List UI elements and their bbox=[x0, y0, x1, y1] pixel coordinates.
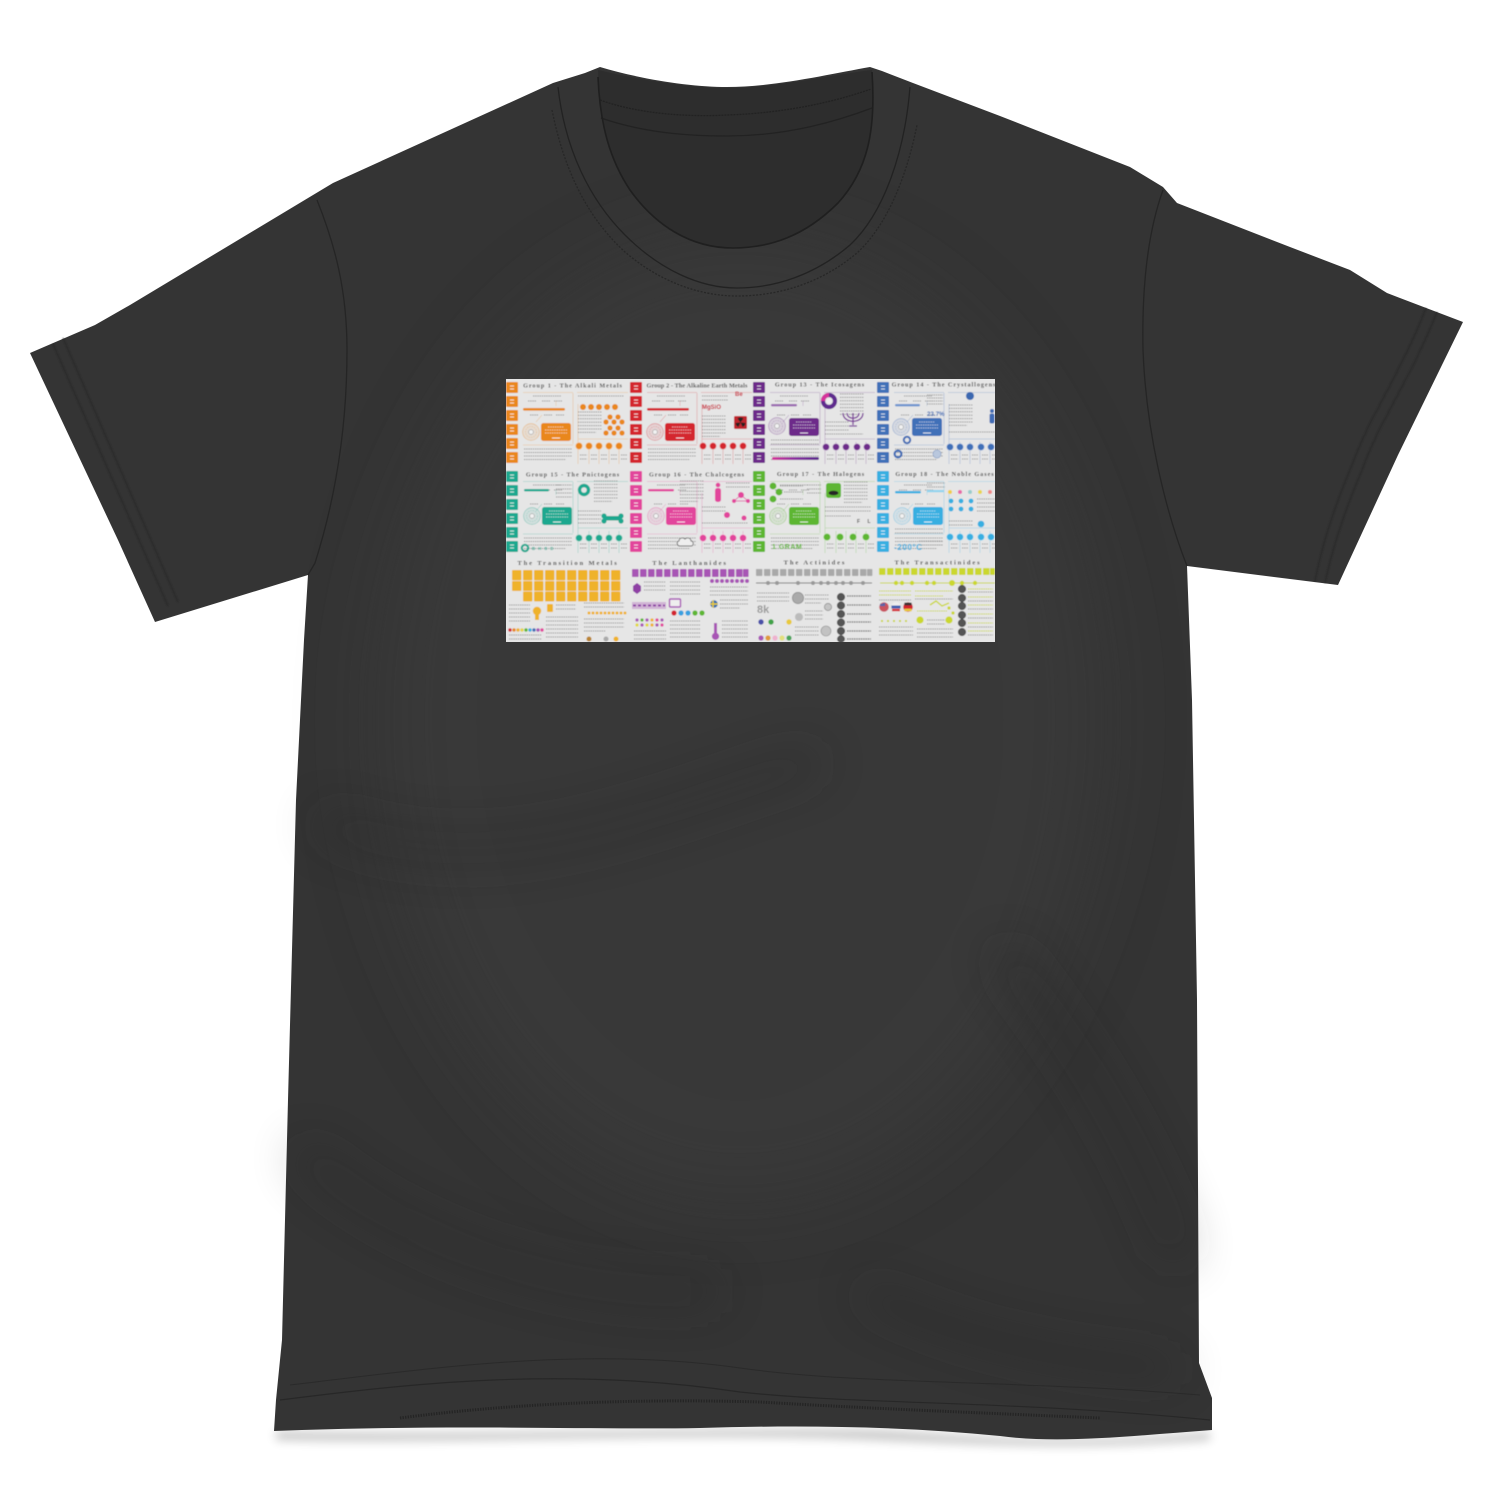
donut icon bbox=[580, 486, 588, 494]
beryllium symbol: Be bbox=[735, 392, 743, 398]
panel: group 2 alkaline earth metals bbox=[630, 382, 752, 464]
hexagon icon bbox=[633, 583, 641, 594]
text blocks bbox=[927, 395, 995, 432]
heading: The Lanthanides bbox=[652, 560, 728, 567]
inner collar back bbox=[598, 70, 873, 248]
text blocks bbox=[680, 481, 750, 523]
heading: The Transition Metals bbox=[517, 560, 619, 567]
panel: transactinides bbox=[879, 560, 995, 637]
heading: Group 16 - The Chalcogens bbox=[649, 472, 745, 478]
collar stitching bbox=[552, 72, 917, 296]
timeline bar bbox=[524, 489, 549, 491]
cloud icon bbox=[677, 538, 693, 546]
bone icon bbox=[601, 513, 624, 524]
panel: group 14 crystallogens bbox=[877, 382, 999, 464]
panel: group 17 halogens bbox=[753, 471, 875, 553]
timeline bar bbox=[647, 408, 689, 411]
timeline bar bbox=[771, 404, 797, 406]
accent dots bbox=[724, 512, 746, 520]
timeline bar bbox=[895, 491, 921, 493]
text blocks bbox=[780, 482, 871, 516]
tablet outline bbox=[670, 599, 680, 607]
text blocks bbox=[879, 589, 993, 637]
element row bbox=[879, 568, 995, 575]
dot row bbox=[580, 404, 618, 410]
large figure: 8k bbox=[757, 604, 770, 616]
text blocks bbox=[757, 593, 871, 639]
panel: group 16 chalcogens bbox=[630, 471, 752, 553]
scientist portraits bbox=[958, 585, 966, 636]
scientist portraits bbox=[837, 593, 845, 643]
grey circles bbox=[792, 592, 832, 636]
atom diagram bbox=[769, 418, 785, 434]
atom diagram bbox=[647, 424, 663, 440]
guitar icon bbox=[712, 623, 719, 640]
element box bbox=[789, 507, 819, 525]
lightbulb icon bbox=[533, 607, 541, 620]
heading: Group 1 - The Alkali Metals bbox=[523, 382, 623, 390]
purple dot row bbox=[710, 579, 749, 583]
panel: lanthanides bbox=[632, 560, 749, 640]
atom diagram bbox=[893, 419, 909, 435]
right sleeve seams bbox=[1143, 190, 1437, 583]
temperature figure: -200°C bbox=[894, 543, 923, 552]
donut chart bbox=[823, 395, 835, 407]
element circles bbox=[822, 444, 870, 450]
timeline bar bbox=[523, 408, 565, 411]
one gram figure: 1 GRAM bbox=[772, 544, 802, 551]
chemical symbols: F L bbox=[857, 519, 874, 525]
printed periodic table poster bbox=[500, 372, 1000, 648]
heading: Group 2 - The Alkaline Earth Metals bbox=[647, 382, 748, 390]
flag: germany bbox=[903, 602, 913, 612]
heading: The Actinides bbox=[784, 560, 846, 566]
element circles bbox=[576, 534, 622, 542]
small tile bbox=[547, 604, 553, 612]
discovery timeline bbox=[756, 581, 872, 585]
text blocks bbox=[578, 396, 624, 432]
atom diagram bbox=[648, 508, 664, 524]
poster background bbox=[500, 372, 1000, 648]
element box bbox=[789, 418, 819, 436]
garment shadow bbox=[276, 1429, 1210, 1446]
atom diagram bbox=[770, 508, 786, 524]
percentage figure: 23.7% bbox=[927, 411, 945, 418]
element circles bbox=[823, 533, 870, 541]
heading: Group 17 - The Halogens bbox=[777, 471, 865, 478]
element circles bbox=[700, 534, 746, 542]
timeline bar bbox=[648, 489, 674, 491]
element circles bbox=[576, 442, 622, 450]
swedish ball bbox=[710, 600, 718, 608]
element circles bbox=[946, 444, 994, 450]
panel: group 13 icosagens bbox=[753, 382, 875, 464]
panel: group 18 noble gases bbox=[877, 471, 999, 553]
element box bbox=[913, 507, 943, 525]
heading: The Transactinides bbox=[894, 560, 982, 566]
flag: russia bbox=[891, 602, 901, 612]
element box bbox=[665, 423, 695, 441]
element circles bbox=[946, 534, 994, 540]
discovery timeline bbox=[880, 580, 995, 586]
dot cluster bbox=[603, 414, 625, 436]
large yellow dots bbox=[916, 606, 955, 624]
radiation icon bbox=[734, 416, 747, 429]
heading: Group 15 - The Pnictogens bbox=[526, 472, 620, 478]
atom diagram bbox=[523, 424, 539, 440]
heading: Group 13 - The Icosagens bbox=[775, 382, 865, 388]
ornament band bbox=[632, 602, 666, 609]
element circles bbox=[700, 442, 746, 450]
panel: actinides bbox=[756, 560, 872, 643]
element row bbox=[756, 569, 872, 576]
yellow dash row bbox=[881, 620, 911, 622]
candelabra icon bbox=[843, 413, 863, 426]
text blocks bbox=[702, 396, 728, 436]
element box bbox=[666, 507, 696, 525]
fabric folds bbox=[300, 760, 1180, 1370]
green bullet circles bbox=[770, 483, 782, 502]
heading: Group 18 - The Noble Gases bbox=[895, 471, 995, 478]
rainbow dots bbox=[508, 628, 544, 632]
element box bbox=[541, 423, 571, 441]
molecule icon bbox=[732, 492, 750, 503]
element row bbox=[632, 569, 749, 577]
text blocks bbox=[771, 394, 864, 444]
text blocks bbox=[509, 603, 624, 639]
atom diagram bbox=[894, 508, 910, 524]
gold dot row bbox=[588, 612, 626, 614]
dot matrix bbox=[635, 618, 664, 627]
text blocks bbox=[895, 483, 997, 545]
bottom metal circles bbox=[586, 636, 618, 642]
chest light shading bbox=[380, 240, 1100, 1200]
formula label: MgSiO bbox=[702, 405, 721, 411]
text blocks bbox=[634, 582, 748, 639]
flag: usa bbox=[879, 602, 889, 612]
icon tile bbox=[826, 483, 841, 498]
bottom hem stitching bbox=[280, 1359, 1210, 1420]
element box bbox=[542, 507, 572, 525]
globe icon bbox=[966, 392, 974, 400]
small circle and caption: B H S D bbox=[532, 546, 554, 551]
atom diagram bbox=[524, 508, 540, 524]
element grid bbox=[512, 570, 620, 602]
hexagon molecule bbox=[930, 601, 949, 606]
left sleeve seams bbox=[53, 200, 347, 606]
panel: group 1 alkali metals bbox=[506, 382, 628, 464]
person icon bbox=[715, 483, 721, 502]
small circles bbox=[895, 437, 941, 458]
element box bbox=[912, 418, 942, 436]
panel: transition metals bbox=[508, 560, 626, 642]
timeline bar bbox=[895, 404, 920, 406]
person icon bbox=[990, 409, 994, 424]
text blocks bbox=[556, 481, 618, 523]
coloured dots bbox=[671, 610, 705, 616]
coloured gas dots bbox=[948, 490, 992, 527]
coloured dots bbox=[758, 619, 792, 641]
heading: Group 14 - The Crystallogens bbox=[892, 382, 996, 388]
panel: group 15 pnictogens bbox=[506, 471, 628, 553]
gradient bar bbox=[772, 457, 819, 460]
